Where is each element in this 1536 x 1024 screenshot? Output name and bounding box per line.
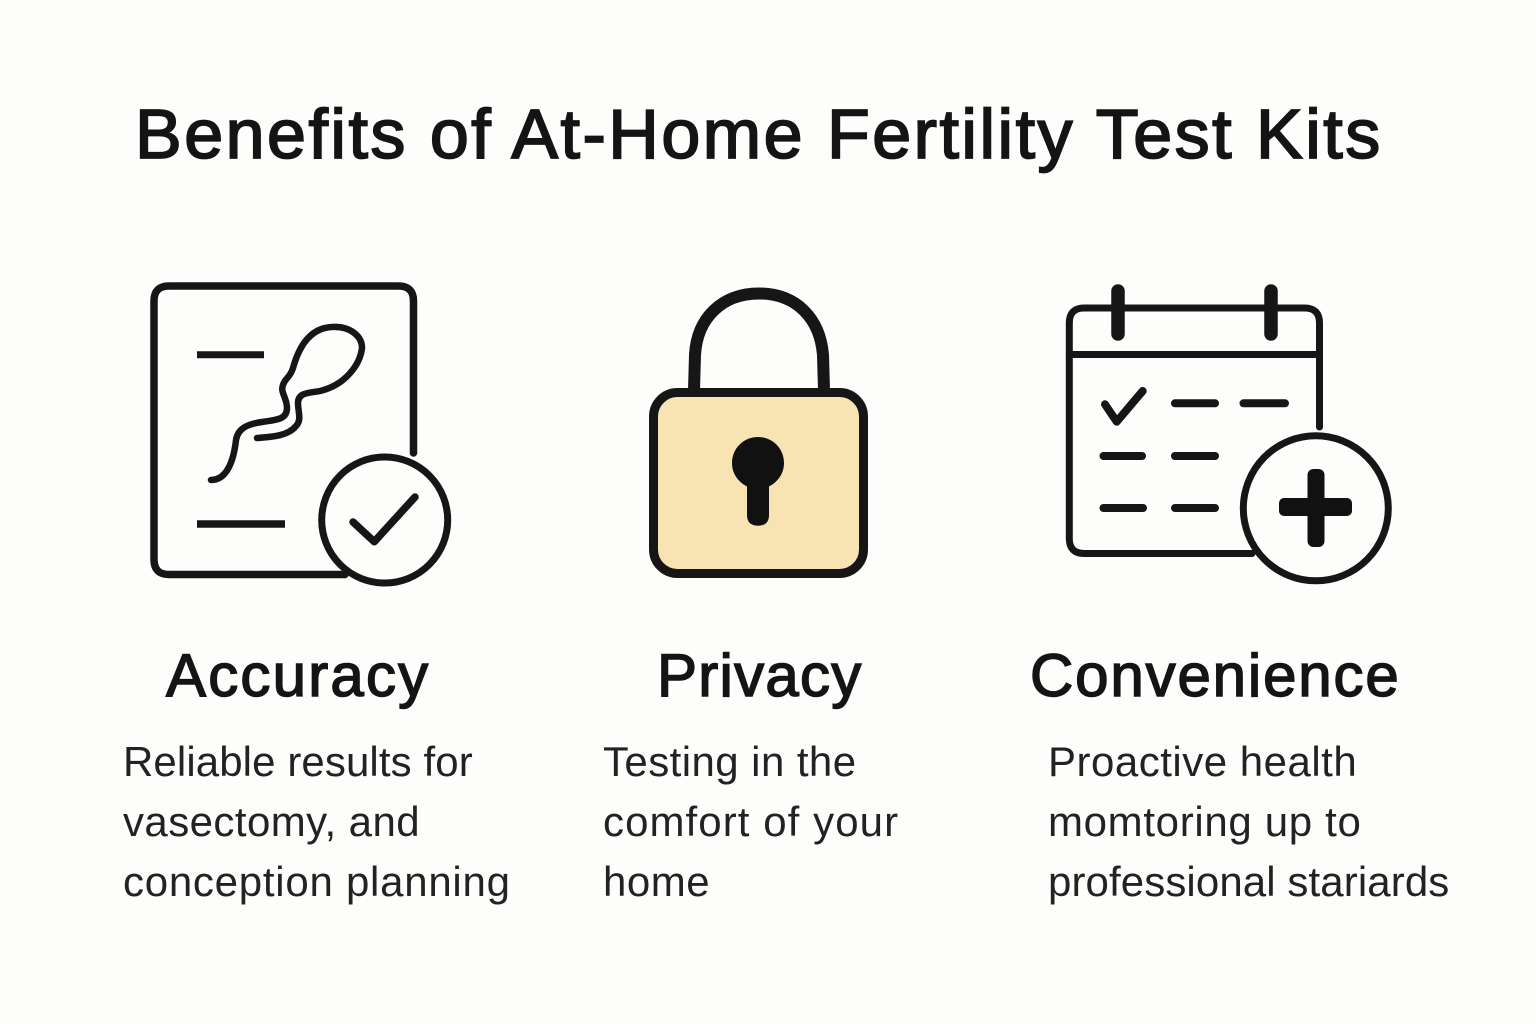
title: Benefits of At-Home Fertility Test Kits: [135, 95, 1383, 173]
text: convenience description: [1048, 738, 1449, 905]
text: convenience description: Proactive health: [1048, 738, 1357, 785]
text: privacy description: comfort of your: [603, 798, 899, 845]
text: accuracy description: conception planning: [123, 858, 511, 905]
text: privacy description: [603, 738, 899, 905]
heading: convenience: Convenience: [1030, 642, 1401, 709]
text: convenience description: momtoring up to: [1048, 798, 1362, 845]
text: accuracy description: Reliable results for: [123, 738, 473, 785]
icon: convenience calendar with plus badge: [1069, 291, 1388, 581]
icon: accuracy document with sperm and check badge: [154, 286, 448, 583]
heading: accuracy: Accuracy: [166, 642, 430, 709]
text: privacy description: home: [603, 858, 710, 905]
text: accuracy description: [123, 738, 511, 905]
text: convenience description: professional stariards: [1048, 858, 1449, 905]
text: privacy description: Testing in the: [603, 738, 857, 785]
heading: privacy: Privacy: [657, 642, 862, 709]
text: accuracy description: vasectomy, and: [123, 798, 420, 845]
icon: privacy padlock: [654, 294, 864, 574]
